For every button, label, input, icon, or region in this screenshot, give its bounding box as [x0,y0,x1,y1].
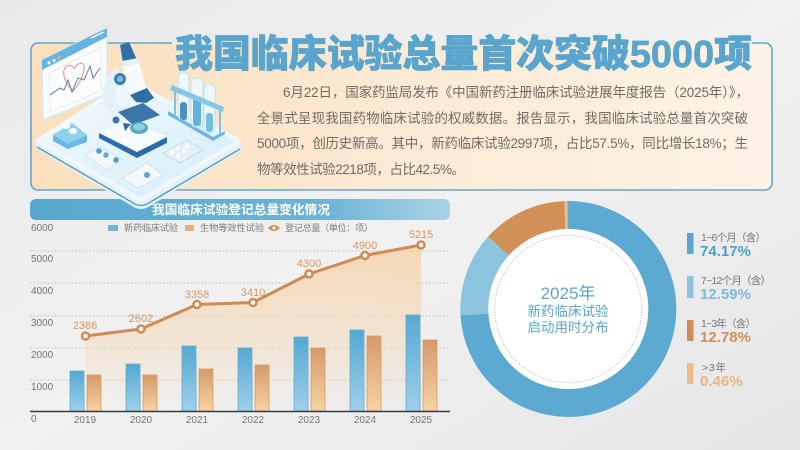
legend: 登记总量（单位：项） [285,222,373,233]
legend item: over 3 years: >3年 [702,361,726,374]
y axis labels: 5000 [31,254,54,265]
line data labels [73,229,433,332]
legend item: 7–12 months [687,274,771,303]
title: 我国临床试验总量首次突破5000项 [175,33,752,76]
legend item: 1–3 years: 1~3年（含） [701,317,756,330]
y axis labels: 6000 [31,223,54,234]
icon: platform [37,81,240,208]
donut centre label: 新药临床试验 [528,304,609,319]
summary text: 全景式呈现我国药物临床试验的权威数据。报告显示，我国临床试验总量首次突破 [257,110,748,126]
donut centre label: 启动用时分布 [528,320,608,335]
icon: pill box [53,123,87,149]
summary text: 5000项，创历史新高。其中，新药临床试验2997项，占比57.5%，同比增长18%；生 [257,135,748,152]
y axis labels: 4000 [31,286,54,297]
legend item: 1–6 months [687,231,766,260]
legend item: over 3 years: 0.46% [700,373,743,390]
line data labels: 4300 [297,258,321,270]
x axis labels: 2023 [298,415,321,426]
icon: heart monitor [42,28,107,120]
x axis labels: 2022 [242,415,265,426]
legend item: 1–6 months: 1~6个月（含） [701,231,766,244]
line data labels: 2386 [73,320,97,332]
bars: bioequivalence trials [87,336,437,411]
legend: 新药临床试验 [124,222,178,233]
y axis labels: 1000 [31,382,54,393]
summary text: 6月22日，国家药监局发布《中国新药注册临床试验进展年度报告（2025年）》， [283,84,749,100]
donut chart [474,215,662,403]
legend item: 7–12 months: 12.59% [700,286,751,303]
chart title bar [30,199,450,220]
y axis labels: 3000 [31,318,54,329]
total line [86,245,421,336]
x axis labels: 2024 [354,415,377,426]
x axis labels: 2020 [130,415,153,426]
line markers [82,242,424,340]
bars: new drug trials [70,315,420,411]
legend [108,222,373,233]
line data labels: 3410 [241,287,265,299]
summary text: 物等效性试验2218项，占比42.5%。 [257,161,465,177]
icon: microscope [99,42,167,158]
legend item: 1–3 years: 12.78% [700,329,751,346]
legend item: 7–12 months: 7~12个月（含） [701,274,771,287]
y axis labels: 2000 [31,350,54,361]
chart: registrations by year [30,222,450,426]
line data labels: 2602 [129,313,153,325]
x axis labels [74,415,433,426]
line data labels: 5215 [409,229,433,241]
legend item: over 3 years [687,361,743,390]
x axis labels: 2025 [410,415,433,426]
icon: test tube rack [168,72,225,141]
line data labels: 4900 [353,240,377,252]
legend: 生物等效性试验 [200,222,264,233]
legend: start-up time [687,231,771,390]
icon: blister packs [85,140,203,188]
legend item: 1–6 months: 74.17% [700,243,751,260]
line data labels: 3358 [185,289,209,301]
y axis labels: 0 [31,414,37,425]
chart title bar: 我国临床试验登记总量变化情况 [152,202,330,217]
x axis labels: 2019 [74,415,97,426]
panel: summary [31,42,772,190]
donut centre label: 2025年 [541,284,595,303]
illustration: laboratory microscope [37,28,240,208]
x axis labels: 2021 [186,415,209,426]
donut centre label [528,284,609,335]
y axis labels [31,223,54,425]
summary text [257,84,749,177]
area under line [86,245,421,411]
legend item: 1–3 years [687,317,756,346]
